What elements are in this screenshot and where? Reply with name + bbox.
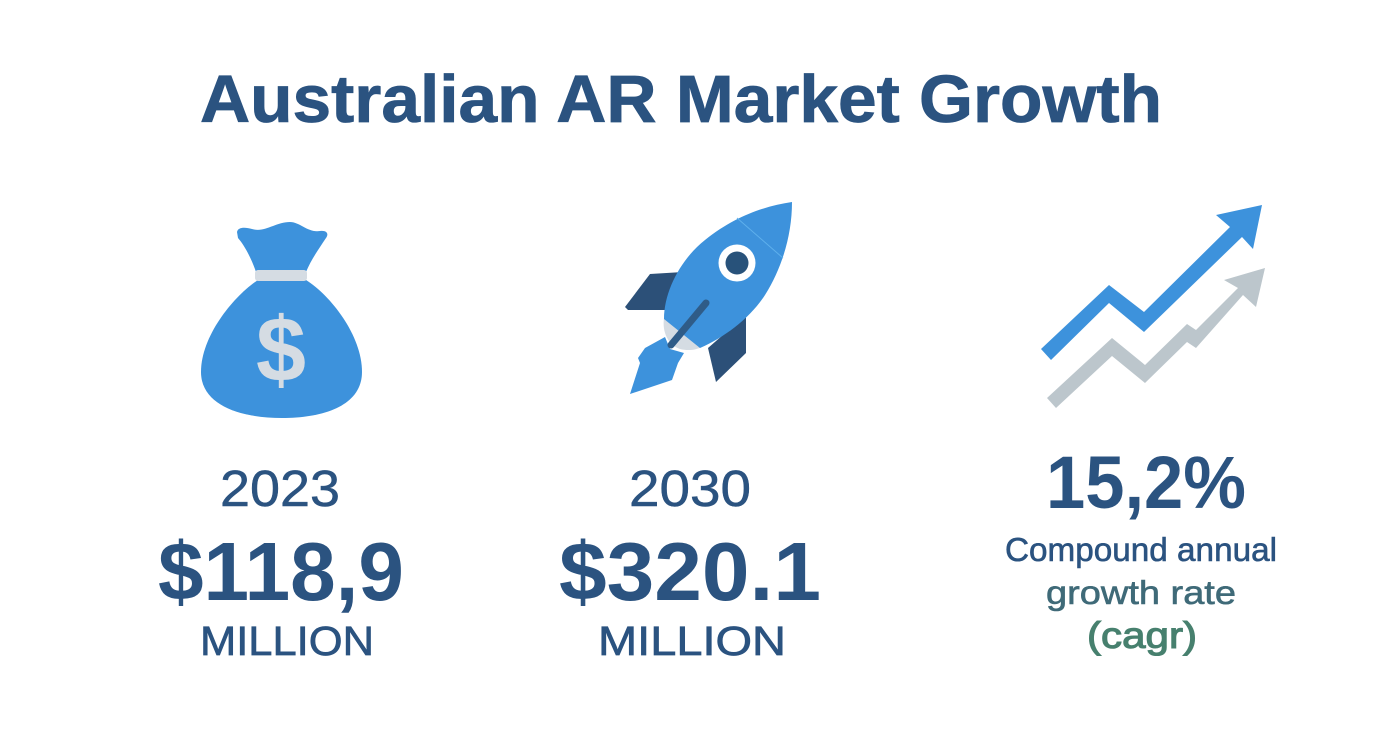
amount 2023: $118,9 — [158, 525, 404, 618]
year 2030: 2030 — [629, 460, 751, 517]
unit 2023: MILLION — [200, 618, 374, 664]
icon: rocket — [625, 202, 792, 394]
icon: growth arrows — [1041, 205, 1265, 408]
amount 2030: $320.1 — [559, 525, 821, 618]
percentage: 15,2% — [1046, 441, 1246, 524]
unit 2030: MILLION — [598, 618, 786, 664]
panel: 2023 value — [158, 222, 404, 664]
icon: money bag — [201, 222, 362, 418]
icon: dollar sign: $ — [256, 299, 306, 401]
label: compound annual: Compound annual — [1005, 531, 1277, 568]
label: growth rate: growth rate — [1046, 574, 1236, 611]
panel: 2030 value — [559, 202, 821, 664]
label: cagr: (cagr) — [1087, 615, 1197, 656]
title: Australian AR Market Growth — [200, 62, 1162, 137]
year 2023: 2023 — [220, 460, 340, 517]
panel: CAGR value — [1005, 205, 1277, 656]
